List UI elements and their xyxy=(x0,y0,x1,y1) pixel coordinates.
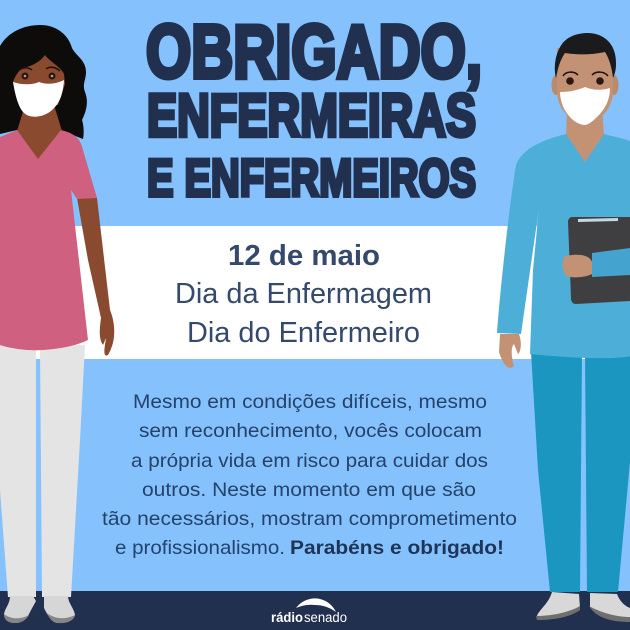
neck and hand xyxy=(566,105,604,162)
logo: rádio senado: senado xyxy=(304,610,347,625)
neck and arm xyxy=(17,105,62,160)
clipboard xyxy=(568,217,630,304)
date block: 12 de maio xyxy=(228,240,380,272)
body message: Parabéns e obrigado! xyxy=(290,537,504,559)
hair xyxy=(555,33,616,78)
hair xyxy=(0,25,87,139)
eyes xyxy=(18,67,60,80)
ears xyxy=(552,75,560,95)
title: ENFERMEIRAS xyxy=(147,82,476,149)
forearm xyxy=(592,248,630,277)
hand xyxy=(562,255,592,277)
mask xyxy=(13,80,64,117)
right shoe xyxy=(44,596,75,623)
body message: a própria vida em risco para cuidar dos xyxy=(131,450,488,472)
title: E ENFERMEIROS xyxy=(147,149,476,208)
body message xyxy=(102,391,517,559)
title: OBRIGADO, xyxy=(146,10,482,94)
date block xyxy=(175,240,432,349)
face xyxy=(557,48,613,122)
face xyxy=(13,55,65,105)
mask xyxy=(560,87,610,125)
body message: sem reconhecimento, vocês colocam xyxy=(139,420,482,442)
eyes xyxy=(563,72,608,85)
body message: tão necessários, mostram comprometimento xyxy=(102,508,517,530)
date block: Dia da Enfermagem xyxy=(175,278,432,310)
footer bar xyxy=(0,591,630,630)
right shoe xyxy=(590,593,630,621)
pants xyxy=(531,352,582,592)
left leg xyxy=(0,345,36,597)
logo: rádio senado: rádio xyxy=(271,610,303,625)
body message: e profissionalismo. xyxy=(115,537,285,559)
body message: outros. Neste momento em que são xyxy=(142,479,476,501)
logo: rádio senado xyxy=(271,598,347,625)
date block: Dia do Enfermeiro xyxy=(187,317,420,349)
white date band xyxy=(0,226,630,359)
body message: Mesmo em condições difíceis, mesmo xyxy=(133,391,487,413)
left shoe xyxy=(537,592,580,619)
shirt xyxy=(0,130,97,350)
title xyxy=(146,10,482,208)
nurse man xyxy=(497,33,630,622)
left shoe xyxy=(4,596,36,623)
right leg xyxy=(40,345,85,597)
nurse woman xyxy=(0,25,114,623)
shirt xyxy=(497,134,630,358)
